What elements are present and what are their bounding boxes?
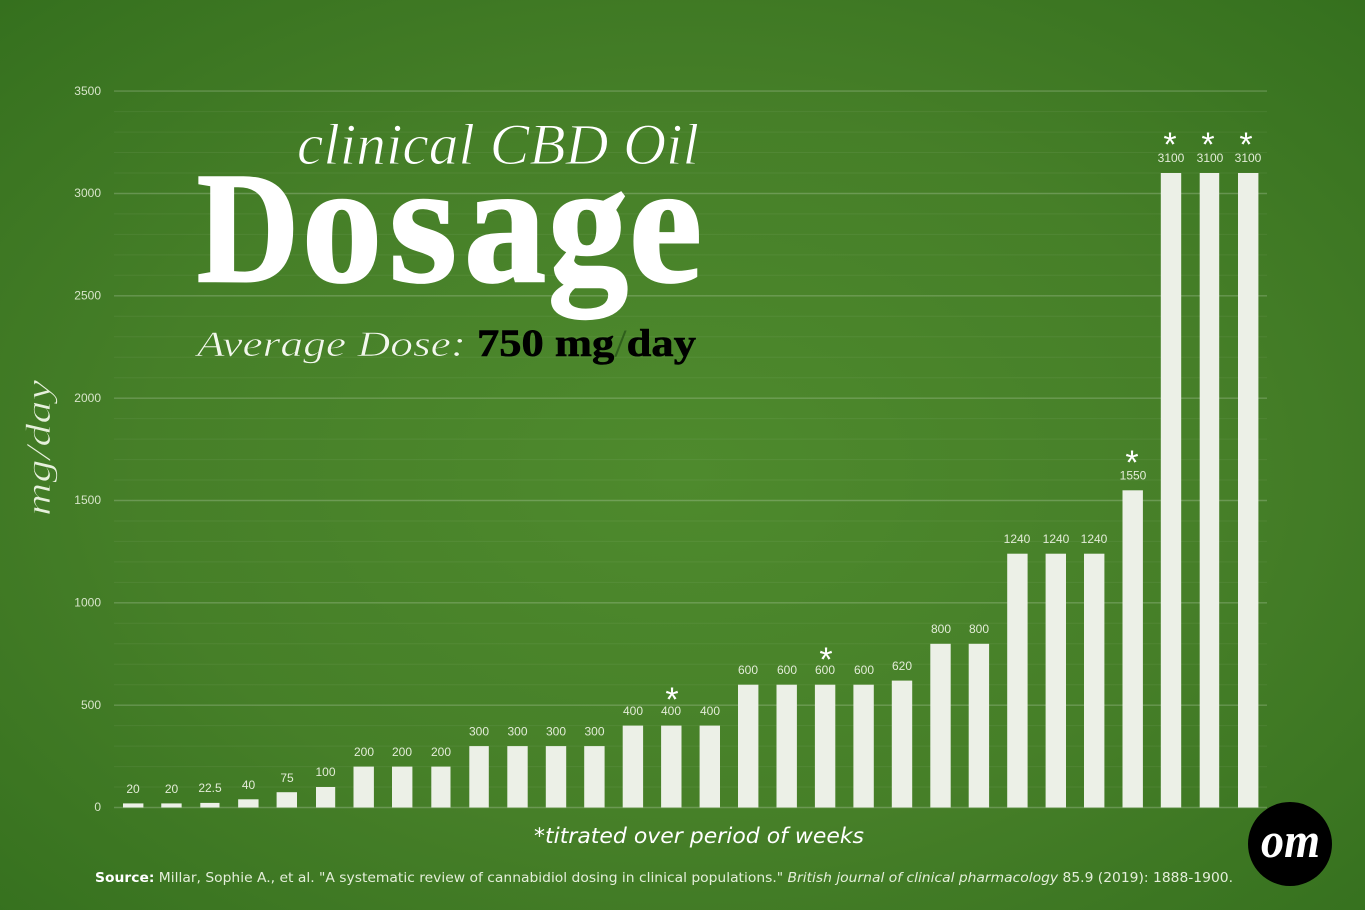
bar: 300: 300 [584,724,605,738]
bar: 40 [238,778,259,808]
bar: 1240 [1043,532,1070,808]
bar: 400 [700,704,720,808]
average dose value: 750 mg /day [477,322,697,365]
title: Dosage: s [389,129,457,319]
bar: 800: 800 [969,622,989,636]
bar: 3100 titrated [1158,126,1185,808]
bar: 300 [469,724,489,808]
bar: 620 [892,659,912,808]
y axis labels [74,84,101,814]
y axis labels: 3000 [74,186,101,200]
logo: om [1248,802,1332,886]
y axis labels: 0 [94,800,101,814]
bar: 300: 300 [469,724,489,738]
bar: 22.5 [198,781,222,808]
title: Dosage: g [548,129,628,319]
bar: 20 [161,782,182,808]
bar: 600 [738,663,758,808]
y axis labels: 1500 [74,493,101,507]
bar: 3100 titrated: * [1239,126,1253,164]
bar: 22.5: 22.5 [198,781,222,795]
bar: 300 [584,724,605,808]
bar: 800 [969,622,989,808]
bar: 1240: 1240 [1004,532,1031,546]
bar: 400: 400 [623,704,643,718]
bar: 100: 100 [315,765,336,779]
bar: 3100 titrated: 3100 [1197,151,1224,165]
bar: 600 titrated: 600 [815,663,835,677]
bar: 400 titrated [661,681,682,808]
bar: 300 [507,724,528,808]
subtitle: clinical CBD Oil: clinical CBD Oil [297,112,699,177]
y axis labels: 1000 [74,596,101,610]
bar: 600: 600 [738,663,758,677]
bar: 3100 titrated: * [1201,126,1215,164]
bar: 200: 200 [392,745,412,759]
bar: 200: 200 [431,745,451,759]
bar: 400 [623,704,643,808]
y axis labels: 2000 [74,391,101,405]
y axis title: mg/day [19,379,58,516]
bar: 1550 titrated: 1550 [1120,468,1147,482]
bar: 3100 titrated [1197,126,1224,808]
title: Dosage: D [197,141,299,316]
bar: 3100 titrated: * [1163,126,1177,164]
bar: 400 titrated: * [665,681,679,719]
bar: 1550 titrated: * [1125,444,1139,482]
bar: 600 [776,663,797,808]
bar: 300 [546,724,566,808]
average dose label: Average Dose: [194,324,466,364]
bar: 200: 200 [354,745,374,759]
bar: 20: 20 [126,782,140,796]
bar: 400: 400 [700,704,720,718]
bar: 200 [431,745,451,808]
bar: 1240: 1240 [1043,532,1070,546]
bar: 800 [930,622,951,808]
bar: 620: 620 [892,659,912,673]
bar: 300: 300 [507,724,528,738]
bar: 400 titrated: 400 [661,704,681,718]
title: Dosage: o [302,129,382,319]
bar: 75 [277,771,297,808]
bar: 1550 titrated [1120,444,1147,808]
title: Dosage: a [464,129,546,319]
logo: om: om [1261,812,1320,868]
y axis labels: 3500 [74,84,101,98]
bar: 600: 600 [854,663,874,677]
bar chart [123,126,1262,808]
title: Dosage: e [629,129,702,319]
bar: 300: 300 [546,724,566,738]
bar: 1240: 1240 [1081,532,1108,546]
bar: 200 [354,745,374,808]
bar: 75: 75 [280,771,294,785]
bar: 600 titrated: * [819,641,833,679]
bar: 800: 800 [931,622,951,636]
bar: 3100 titrated: 3100 [1235,151,1262,165]
bar: 200 [392,745,412,808]
bar: 600 titrated [815,641,835,808]
bar: 40: 40 [242,778,255,792]
bar: 1240 [1004,532,1031,808]
bar: 3100 titrated: 3100 [1158,151,1185,165]
y axis labels: 2500 [74,288,101,302]
bar: 20 [123,782,143,808]
bar: 3100 titrated [1235,126,1262,808]
footnote: titrated: *titrated over period of weeks [534,824,864,848]
source citation: Source: Millar, Sophie A., et al. "A systematic review of cannabidiol dosing in clinical populations." British journal of clinical pharmacology 85.9 (2019): 1888-1900. [95,870,1233,886]
bar: 20: 20 [165,782,178,796]
bar: 1240 [1081,532,1108,808]
bar: 100 [315,765,336,808]
y axis labels: 500 [81,698,101,712]
bar: 600 [853,663,874,808]
bar: 600: 600 [777,663,797,677]
